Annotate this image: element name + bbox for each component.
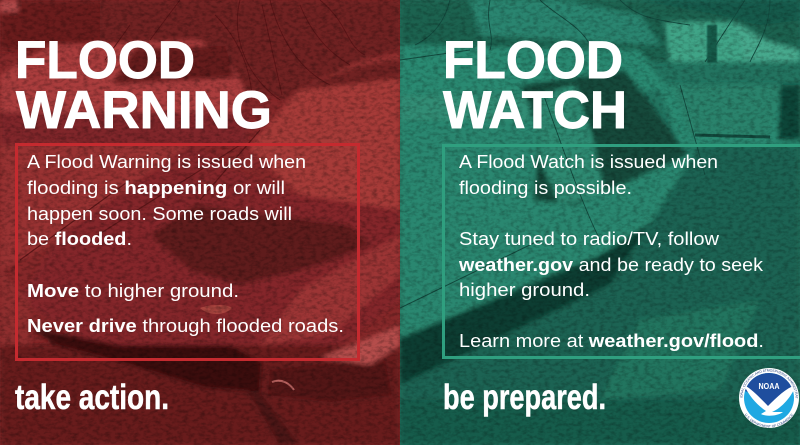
text box: warning description: Never drive through flooded roads. <box>27 315 344 336</box>
text box: watch description: weather.gov and be ready to seek <box>458 254 764 275</box>
text box: watch description: Learn more at weather.gov/flood . <box>459 330 764 351</box>
text box: warning description <box>16 144 358 360</box>
heading: flood warning <box>15 31 272 140</box>
heading: flood watch: WATCH <box>443 81 627 140</box>
tagline: be prepared: be prepared. <box>443 378 606 417</box>
text box: warning description: flooding is happening or will <box>27 177 285 198</box>
text box: warning description: happen soon. Some roads will <box>27 203 292 224</box>
photo: flooded cars tinted red <box>0 0 400 445</box>
icon: NOAA logo: NATIONAL OCEANIC AND ATMOSPHERIC ADMINISTRATION <box>740 369 798 398</box>
text box: warning description: Move to higher ground. <box>27 280 239 301</box>
text box: watch description: A Flood Watch is issued when <box>459 151 718 172</box>
text box: warning description: A Flood Warning is issued when <box>27 151 306 172</box>
tagline: take action: take action. <box>15 378 169 417</box>
heading: flood watch <box>443 31 627 140</box>
heading: flood warning: FLOOD <box>15 31 195 90</box>
photo: flooded cars tinted green <box>400 0 800 445</box>
text box: watch description: Stay tuned to radio/TV, follow <box>459 228 720 249</box>
text box: watch description <box>444 146 800 358</box>
panel: flood warning <box>0 0 400 445</box>
panel: flood watch <box>400 0 800 445</box>
text box: watch description: higher ground. <box>459 279 590 300</box>
text box: warning description: be flooded . <box>27 228 132 249</box>
icon: NOAA logo: U.S. DEPARTMENT OF COMMERCE <box>745 413 794 428</box>
heading: flood warning: WARNING <box>16 81 272 140</box>
text box: watch description: flooding is possible. <box>459 177 632 198</box>
icon: NOAA logo: NOAA <box>758 382 780 391</box>
heading: flood watch: FLOOD <box>443 31 623 90</box>
